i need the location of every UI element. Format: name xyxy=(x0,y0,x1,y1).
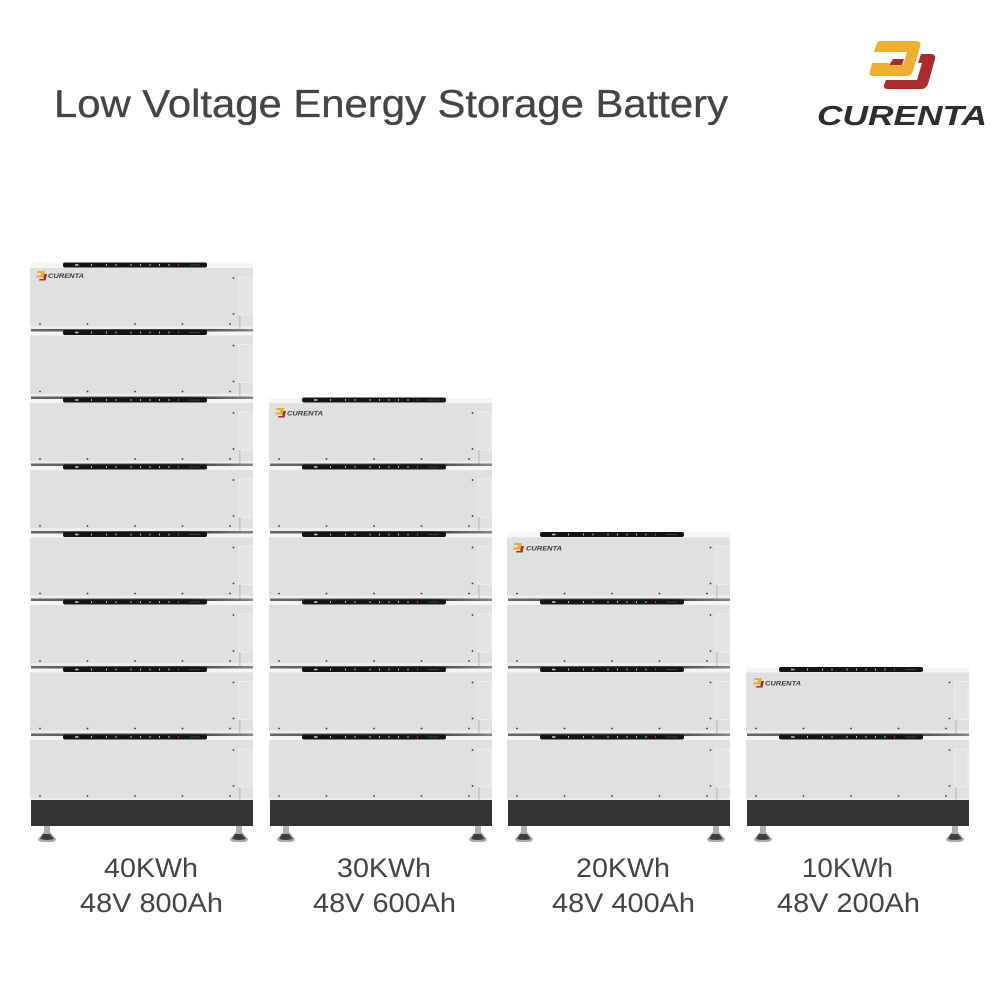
icon: logo yellow link xyxy=(870,41,920,76)
icon: logo red link xyxy=(884,54,935,89)
logo wordmark: CURENTA xyxy=(817,100,987,131)
title: Low Voltage Energy Storage Battery xyxy=(54,83,729,126)
label: 30KWh: 30KWh xyxy=(337,853,431,883)
logo: Curenta xyxy=(817,41,987,131)
brand label: CURENTA xyxy=(287,410,323,418)
label: 48V 800Ah: 48V 800Ah xyxy=(80,888,223,918)
brand label: CURENTA xyxy=(765,680,801,688)
label: 10KWh: 10KWh xyxy=(802,853,893,883)
brand label: CURENTA xyxy=(48,273,84,280)
battery stack: 20KWh xyxy=(507,532,730,842)
battery stack: 40KWh xyxy=(30,262,253,842)
label: 48V 200Ah: 48V 200Ah xyxy=(777,888,920,918)
battery stack: 10KWh xyxy=(746,667,969,842)
label: 40KWh: 40KWh xyxy=(104,853,198,883)
label: 20KWh: 20KWh xyxy=(576,853,670,883)
label: 48V 600Ah: 48V 600Ah xyxy=(313,888,456,918)
brand label: CURENTA xyxy=(526,546,562,552)
battery stack: 30KWh xyxy=(269,398,492,842)
label: 48V 400Ah: 48V 400Ah xyxy=(552,888,695,918)
